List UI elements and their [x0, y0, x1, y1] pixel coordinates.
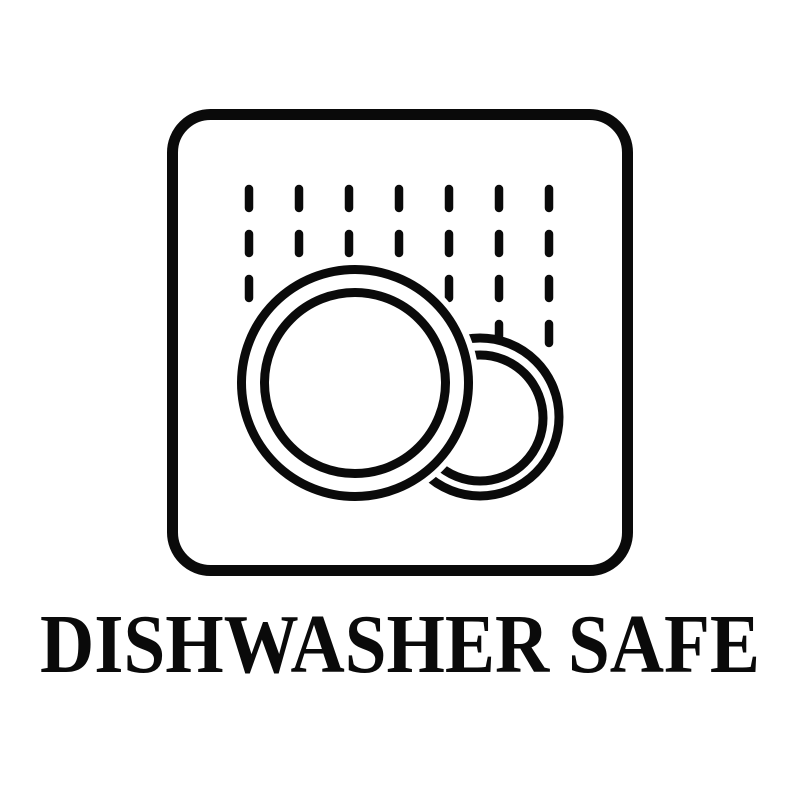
icon: water droplets — [249, 189, 549, 343]
icon: large plate — [236, 264, 474, 502]
icon: small plate — [401, 338, 559, 496]
icon frame: rounded square — [172, 114, 628, 570]
